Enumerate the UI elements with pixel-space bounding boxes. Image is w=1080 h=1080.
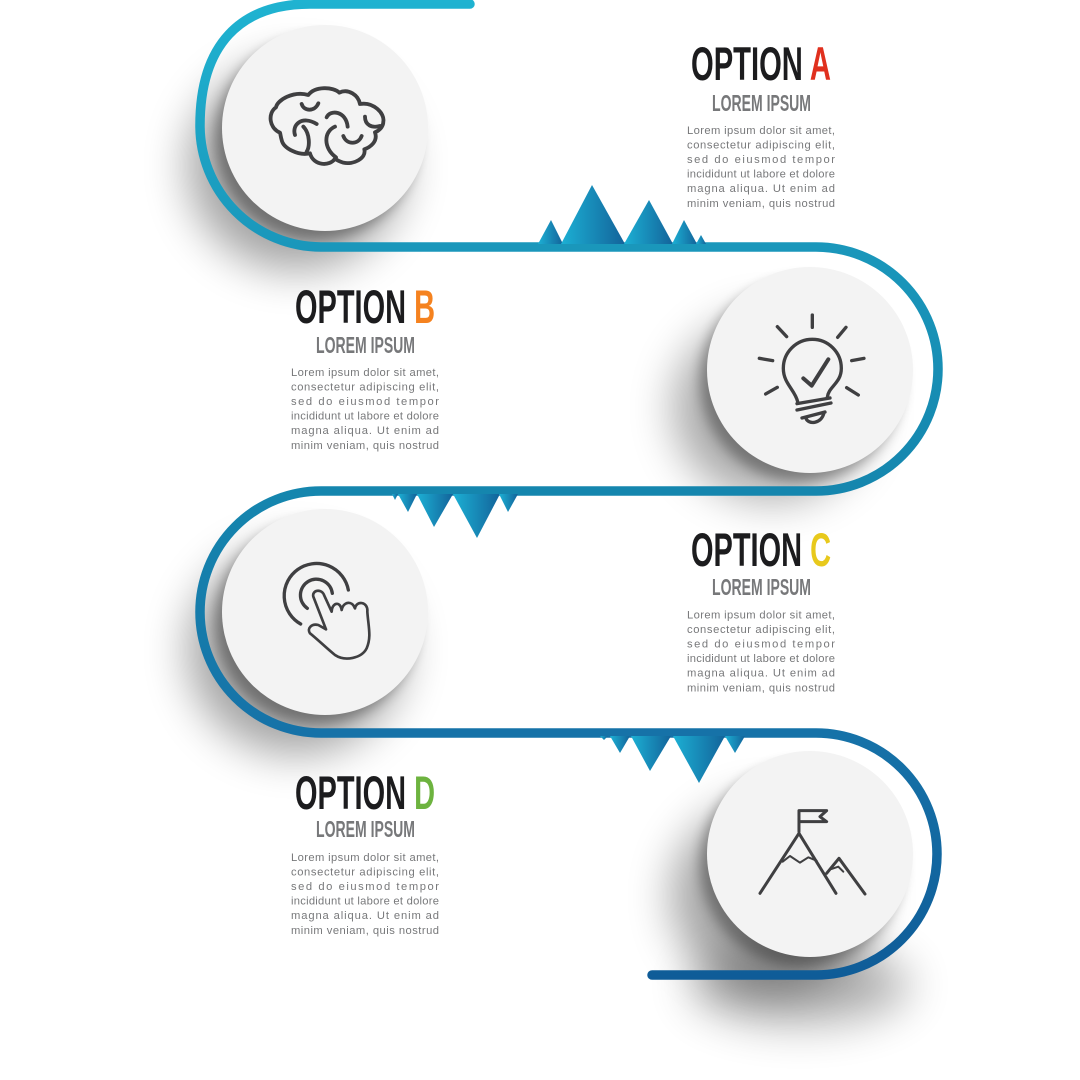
text block: option B: magna aliqua. Ut enim ad: [291, 425, 439, 437]
circle C with pointing hand icon: [222, 509, 428, 715]
text block: option C: incididunt ut labore et dolore: [687, 653, 835, 665]
text block: option D: [291, 852, 439, 937]
text block: option C: sed do eiusmod tempor: [687, 638, 835, 650]
text block: option B: sed do eiusmod tempor: [291, 396, 439, 408]
winding timeline ribbon: [200, 4, 938, 975]
text block: option C: Lorem ipsum dolor sit amet,: [687, 610, 835, 622]
subheading: option A: LOREM IPSUM: [712, 90, 811, 116]
icon: lightbulb with check: [759, 315, 864, 422]
triangles: group C peaks: [392, 494, 518, 538]
icon: brain: [271, 88, 383, 164]
text block: option C: magna aliqua. Ut enim ad: [687, 668, 835, 680]
circle drop shadows: [188, 36, 910, 1025]
text block: option A: magna aliqua. Ut enim ad: [687, 183, 835, 195]
text block: option A: consectetur adipiscing elit,: [687, 140, 835, 152]
heading: option C: OPTION C: [691, 523, 831, 576]
text block: option D: magna aliqua. Ut enim ad: [291, 910, 439, 922]
text block: option B: Lorem ipsum dolor sit amet,: [291, 367, 439, 379]
text block: option D: Lorem ipsum dolor sit amet,: [291, 852, 439, 864]
text block: option C: [687, 610, 835, 694]
triangles: group A peaks: [538, 185, 706, 244]
text block: option C: minim veniam, quis nostrud: [687, 682, 835, 694]
circle D with mountain icon: [707, 751, 913, 957]
text block: option D: incididunt ut labore et dolore: [291, 896, 439, 908]
text block: option A: [687, 125, 835, 210]
heading: option A: OPTION A: [691, 37, 831, 90]
icon: mountain with flag: [760, 811, 865, 894]
subheading: option B: LOREM IPSUM: [316, 332, 415, 358]
text block: option C: consectetur adipiscing elit,: [687, 624, 835, 636]
icon: tapping hand: [284, 563, 369, 658]
text block: option A: incididunt ut labore et dolore: [687, 168, 835, 180]
panel: option C text: [687, 523, 835, 694]
circle B with lightbulb icon: [707, 267, 913, 473]
circle A with brain icon: [222, 25, 428, 231]
text block: option B: consectetur adipiscing elit,: [291, 382, 439, 394]
subheading: option C: LOREM IPSUM: [712, 574, 811, 600]
panel: option A text: [687, 37, 835, 210]
text block: option A: Lorem ipsum dolor sit amet,: [687, 125, 835, 137]
text block: option A: minim veniam, quis nostrud: [687, 198, 835, 210]
text block: option D: minim veniam, quis nostrud: [291, 925, 439, 937]
subheading: option D: LOREM IPSUM: [316, 816, 415, 842]
text block: option B: incididunt ut labore et dolore: [291, 410, 439, 422]
text block: option A: sed do eiusmod tempor: [687, 154, 835, 166]
text block: option B: [291, 367, 439, 452]
heading: option D: OPTION D: [295, 766, 435, 819]
heading: option B: OPTION B: [295, 280, 435, 333]
panel: option D text: [291, 766, 439, 937]
text block: option B: minim veniam, quis nostrud: [291, 440, 439, 452]
triangles: group D peaks: [600, 736, 745, 783]
text block: option D: consectetur adipiscing elit,: [291, 866, 439, 878]
text block: option D: sed do eiusmod tempor: [291, 881, 439, 893]
panel: option B text: [291, 280, 439, 452]
